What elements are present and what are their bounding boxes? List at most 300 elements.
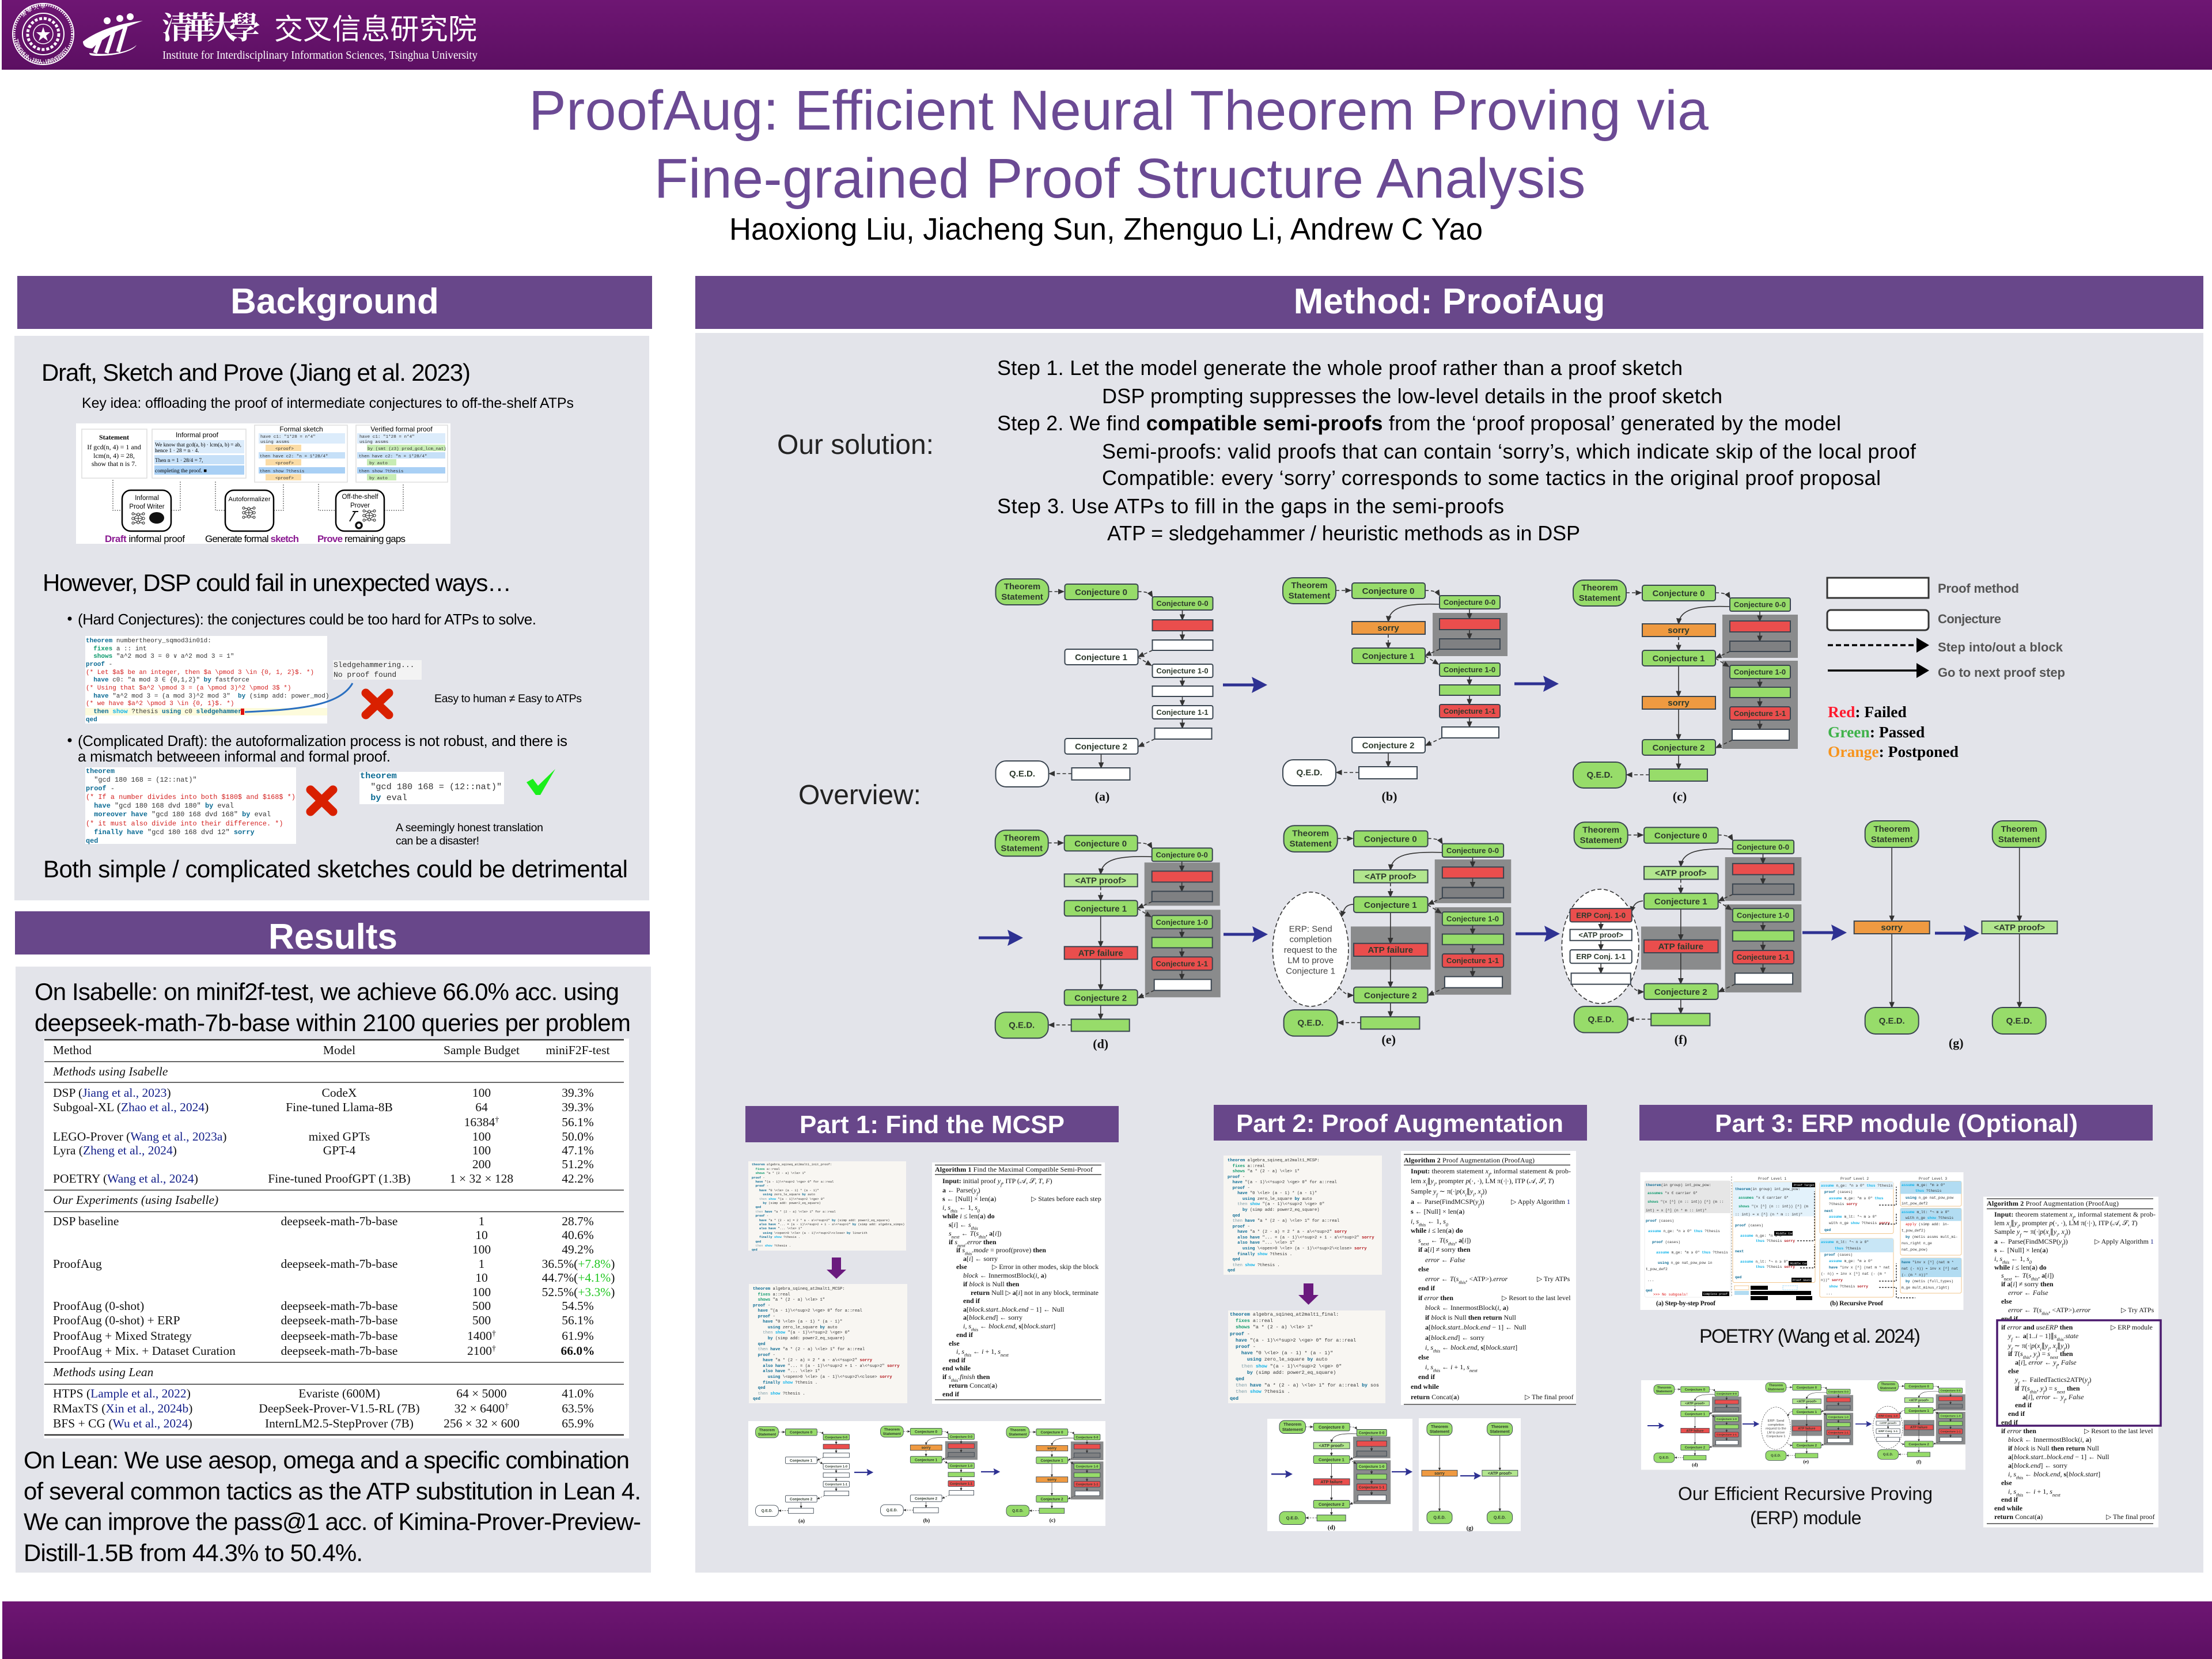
code: initial proof: using zero_le_square by auto: [752, 1193, 815, 1196]
code: MCSP: also have "... \<le> 1": [753, 1369, 820, 1374]
figure: DSP pipeline: hence 1 · 28 = n · 4.: [155, 448, 199, 454]
algorithm 2 with ERP: end if: [2001, 1495, 2018, 1503]
diagram (b): (b): [1382, 789, 1397, 804]
arrow: b to c: [1514, 676, 1559, 692]
results table: 100: [472, 1285, 491, 1299]
figure: POETRY recursive proof: by (metis (full_types): [1906, 1279, 1953, 1283]
figure: POETRY recursive proof: assume m_ge: "m ≥ 0" thus ?thesis: [1656, 1251, 1728, 1255]
algorithm 2: i, sthis ← i + 1, snext: [1425, 1363, 1478, 1373]
algorithm 2: Input: theorem statement xf, informal statement & prob-: [1411, 1167, 1571, 1177]
algorithm 2: ▷ Resort to the last level: [1502, 1294, 1571, 1302]
results table: 100: [472, 1143, 491, 1157]
figure: DSP pipeline: [76, 423, 450, 544]
algorithm 1: ▷ Error in other modes, skip the block: [992, 1263, 1099, 1271]
results table: ProofAug + Mix. + Dataset Curation: [53, 1344, 236, 1358]
figure: POETRY recursive proof: thus ?thesis sorry: [1756, 1265, 1795, 1269]
key idea: Key idea: offloading the proof of intermediate conjectures to off-the-shelf ATPs: [82, 395, 574, 411]
algorithm 2 with ERP: i, sthis ← i + 1, snext: [2008, 1487, 2061, 1498]
heading: Part 1: Part 1: Find the MCSP: [800, 1111, 1065, 1139]
results table: Sample Budget: [444, 1043, 520, 1057]
algorithm 2: return Concat(a): [1411, 1393, 1459, 1401]
diagram (d): Q.E.D.: [1009, 1020, 1035, 1030]
diagram (g): Q.E.D.: [2006, 1016, 2032, 1026]
algorithm 2 with ERP: yf ← FailedTactics2ATP(yf): [2014, 1376, 2091, 1386]
figure: DSP pipeline: Draft informal proof: [105, 533, 185, 544]
arrow: within g: [1935, 925, 1979, 941]
figure: POETRY recursive proof: shows "(x [^] (n :: int)) [^] (m: [1738, 1204, 1808, 1209]
results table: 40.6%: [562, 1228, 594, 1242]
algorithm 2 with ERP: a[i], error ← yf, False: [2022, 1393, 2084, 1403]
heading: Results: Results: [268, 917, 397, 957]
algorithm 1: else: [956, 1263, 967, 1271]
algorithm 2: Algorithm 2 Proof Augmentation (ProofAug): [1404, 1156, 1535, 1164]
diagram (f): ATP failure: [1658, 942, 1703, 952]
callout: no proof found: Sledgehammering...: [334, 661, 414, 669]
steps text: Step 2. We find compatible semi-proofs from the ‘proof proposal’ generated by the model: [997, 411, 1841, 435]
diagram (a): (a): [1095, 789, 1109, 804]
arrow: down to MCSP: [827, 1257, 846, 1279]
results table: Fine-tuned ProofGPT (1.3B): [268, 1172, 411, 1185]
figure: POETRY recursive proof: (a) Step-by-step Proof: [1656, 1300, 1715, 1307]
algorithm 2: ▷ Try ATPs: [1537, 1275, 1570, 1283]
icon: IIIS logo: [83, 13, 143, 56]
diagram (e): Conjecture 1-0: [1446, 914, 1499, 923]
code: initial proof: qed: [752, 1206, 761, 1209]
figure: POETRY recursive proof: >>> No subgoals!: [1653, 1293, 1688, 1297]
algorithm 2 with ERP: error ← T(sthis, <ATP>).error: [2008, 1306, 2090, 1316]
results table: deepseek-math-7b-base: [281, 1344, 397, 1358]
results table: 54.5%: [562, 1299, 594, 1313]
figure: DSP pipeline: Proof Writer: [129, 503, 165, 510]
results table: deepseek-math-7b-base: [281, 1313, 397, 1327]
code: initial proof: proof -: [752, 1176, 765, 1180]
figure: POETRY recursive proof: assume m_ge: "m ≥ 0" thus: [1829, 1196, 1884, 1200]
results table: 41.0%: [562, 1387, 594, 1400]
code: complicated draft example: moreover have "gcd 180 168 dvd 168" by eval: [86, 810, 271, 819]
heading: Part 1: [745, 1106, 1119, 1142]
diagram (d): Statement: [1001, 843, 1043, 853]
results table: mixed GPTs: [309, 1130, 370, 1143]
figure: POETRY recursive proof: qed: [1735, 1275, 1742, 1279]
algorithm 2: ▷ Apply Algorithm 1: [1511, 1198, 1570, 1206]
code: MCSP copy: [1224, 1156, 1382, 1275]
icon: Tsinghua University seal: 清 華 大 學: [21, 4, 46, 17]
note: honest translation: can be a disaster!: [396, 835, 479, 847]
results table: 39.3%: [562, 1086, 594, 1100]
figure: DSP pipeline: have c1: "1*28 = n*4": [359, 435, 415, 440]
figure: POETRY recursive proof: nus_right n_ge: [1902, 1241, 1932, 1245]
algorithm 2 with ERP: snext ← T(sthis, a[i]): [2001, 1271, 2054, 1281]
algorithm 1: [932, 1162, 1105, 1404]
algorithm 2 with ERP: a[block.start..block.end − 1] ← Null: [2008, 1453, 2109, 1461]
code: hard conjecture example: [85, 636, 329, 724]
code: final proof: then show "(a - 1)\<^sup>2 \<ge> 0": [1230, 1363, 1342, 1369]
figure: POETRY recursive proof: t_pow_def2): [1902, 1229, 1926, 1233]
code: simple proof: "gcd 180 168 = (12::nat)": [360, 782, 502, 792]
results table: 52.5%(+3.3%): [542, 1285, 615, 1299]
code: hard conjecture example: have "a^2 mod 3 = (a mod 3)^2 mod 3" by (simp add: power_mod): [86, 693, 329, 700]
code: MCSP: then show ?thesis .: [753, 1392, 805, 1396]
figure: DSP pipeline: then have c2: "n = 1*28/4": [359, 454, 427, 459]
code: initial proof: by (simp add: power2_eq_square): [752, 1202, 821, 1205]
algorithm 1: Algorithm 1 Find the Maximal Compatible Semi-Proof: [935, 1165, 1093, 1173]
figure: POETRY recursive proof: assume n_ge: "n ≥ 0" thus ?thesis: [1821, 1184, 1893, 1188]
code: hard conjecture example: fixes a :: int: [86, 646, 147, 653]
code: hard conjecture example: (* Using that $a^2 \pmod 3 = (a \pmod 3)^2 \pmod 3$ *): [86, 685, 291, 692]
icon: Tsinghua University seal: TSINGHUA · 1911 · UNIVERSITY: [16, 39, 67, 63]
results table: 100: [472, 1243, 491, 1256]
steps text: ATP = sledgehammer / heuristic methods as in DSP: [1107, 521, 1580, 545]
figure: POETRY recursive proof: assume n_lt: "¬ n ≥ 0": [1821, 1240, 1869, 1244]
algorithm 2 with ERP: end if: [2001, 1315, 2018, 1323]
diagram (e): Conjecture 1-1: [1446, 956, 1499, 965]
algorithm 1: return Null ▷ a[i] not in any block, terminate: [971, 1289, 1099, 1297]
algorithm 2: end while: [1411, 1382, 1440, 1391]
subtitle: DSP failures: However, DSP could fail in unexpected ways…: [43, 569, 512, 596]
code: complicated draft example: have "gcd 180 168 dvd 180" by eval: [86, 802, 234, 810]
figure: POETRY recursive proof: proof (cases): [1824, 1253, 1853, 1257]
legend: colours: [1828, 703, 1959, 760]
thumbnail: diagrams a b c: [748, 1421, 1105, 1526]
algorithm 1: snext ← T(sthis, a[i]): [949, 1229, 1001, 1240]
figure: POETRY recursive proof: assume n_lt: "¬ n ≥ 0": [1740, 1260, 1788, 1264]
results table: DSP (Jiang et al., 2023): [53, 1086, 171, 1100]
algorithm 1: else: [949, 1339, 960, 1347]
figure: POETRY recursive proof: assumes "x ∈ carrier G": [1647, 1191, 1698, 1195]
results table: Method: [53, 1043, 92, 1057]
algorithm 1: end if: [949, 1356, 966, 1364]
code: final proof: using zero_le_square by auto: [1230, 1357, 1327, 1362]
diagram (c): Conjecture 1-1: [1734, 709, 1786, 718]
figure: POETRY recursive proof: assume n_ge: "n ≥ 0": [1740, 1234, 1784, 1238]
algorithm 1: a ← Parse(yf): [942, 1186, 980, 1196]
diagram (f): Conjecture 0: [1654, 831, 1707, 841]
bullet: complicated draft: a mismatch betweeen informal and formal proof.: [78, 748, 391, 765]
diagram (b): Statement: [1289, 591, 1330, 601]
algorithm 1: a[i] ← sorry: [963, 1255, 998, 1263]
algorithm 2 with ERP: s ← [Null] × len(a): [1994, 1246, 2048, 1254]
results table: 42.2%: [562, 1172, 594, 1185]
results table: 50.0%: [562, 1130, 594, 1143]
diagram (c): Conjecture 2: [1653, 743, 1705, 753]
results table: 32 × 6400†: [454, 1402, 509, 1415]
figure: POETRY recursive proof: thus ?thesis sorry: [1756, 1239, 1795, 1243]
legend: colours: Green: Passed: [1828, 723, 1925, 741]
arrow: sledgehammer to message: [245, 683, 353, 712]
figure: POETRY recursive proof: t_pow_def2: [1646, 1267, 1668, 1271]
results table: deepseek-math-7b-base: [281, 1329, 397, 1343]
algorithm 2: Sample yf ∼ π(·|p(xi∥yi, xf)): [1411, 1187, 1487, 1197]
algorithm 2: s ← [Null] × len(a): [1411, 1207, 1464, 1215]
code: MCSP: also have "... = (a - 1)\<^sup>2 + 1 - a\<^sup>2" sorry: [753, 1363, 900, 1369]
university name calligraphy: 清華大學: [162, 3, 260, 48]
title: Fine-grained Proof Structure Analysis: [654, 147, 1585, 210]
algorithm 2: block ← InnermostBlock(i, a): [1425, 1304, 1509, 1312]
code: initial proof: qed: [752, 1240, 761, 1244]
legend: node and arrow types: Step into/out a block: [1938, 640, 2063, 654]
code: MCSP: using \<open>0 \<le> (a - 1)\<^sup>2\<close> sorry: [753, 1374, 892, 1380]
diagram (b): Conjecture 0: [1362, 586, 1414, 596]
diagram (a): Conjecture 1-1: [1156, 708, 1209, 717]
algorithm 1: if sthis.finish then: [942, 1373, 990, 1382]
diagram (e): Q.E.D.: [1297, 1018, 1324, 1028]
results table: 200: [472, 1157, 491, 1171]
figure: DSP pipeline: <proof>: [275, 447, 294, 452]
results table: 66.0%: [560, 1344, 595, 1358]
results table: InternLM2.5-StepProver (7B): [265, 1416, 414, 1430]
steps text: [997, 356, 1916, 545]
figure: POETRY recursive proof: using n_ge nat_pow_pow: [1906, 1196, 1953, 1200]
figure: DSP pipeline: We know that gcd(a, b) · lcm(a, b) = ab,: [155, 442, 241, 448]
arrow: d to e: [1224, 926, 1268, 942]
results table: CodeX: [322, 1086, 357, 1100]
legend: node and arrow types: Proof method: [1938, 581, 2019, 596]
results table: Methods using Isabelle: [52, 1065, 168, 1078]
figure: DSP pipeline: Prove remaining gaps: [317, 533, 406, 544]
code: hard conjecture example: shows "a^2 mod 3 = 0 ∨ a^2 mod 3 = 1": [86, 653, 234, 660]
steps text: Step 3. Use ATPs to fill in the gaps in the semi-proofs: [997, 494, 1504, 518]
algorithm 1: i, sthis ← i + 1, snext: [956, 1347, 1009, 1357]
code: simple proof: [359, 771, 504, 804]
diagram (g): [1854, 821, 2057, 1050]
algorithm 1: while i ≤ len(a) do: [942, 1212, 995, 1220]
figure: POETRY recursive proof: n))" sorry: [1821, 1278, 1843, 1282]
algorithm 2 with ERP: Sample yf ∼ π(·|p(xi∥yi, xf)): [1994, 1228, 2070, 1237]
code: initial proof: also have "... \<le> 1": [752, 1227, 802, 1230]
legend: node and arrow types: [1827, 578, 2065, 680]
code: final proof: [1228, 1310, 1385, 1403]
results table: Model: [323, 1043, 355, 1057]
diagram (a): Conjecture 2: [1075, 742, 1127, 752]
algorithm 2: ▷ The final proof: [1525, 1393, 1574, 1401]
algorithm 2 with ERP: yf ← a[1..i − 1]∥sthis.state: [2008, 1332, 2079, 1342]
algorithm 1: end if: [942, 1390, 960, 1398]
figure: POETRY recursive proof: using n_ge nat_pow_pow in: [1658, 1261, 1713, 1265]
authors: Haoxiong Liu, Jiacheng Sun, Zhenguo Li, Andrew C Yao: [729, 212, 1483, 247]
diagram (c): Conjecture 1: [1653, 654, 1705, 664]
figure: POETRY recursive proof: assumes "x ∈ carrier G": [1738, 1196, 1789, 1200]
diagram (b): Conjecture 1-1: [1444, 707, 1495, 715]
figure: POETRY recursive proof: (b) Recursive Proof: [1830, 1300, 1883, 1307]
code: complicated draft example: (* it must also divide into their difference. *): [86, 820, 283, 828]
diagram (c): sorry: [1668, 698, 1690, 708]
diagram (e): LM to prove: [1287, 956, 1334, 965]
heading: Method: [695, 276, 2203, 329]
figure: POETRY recursive proof: Complete proof: [1703, 1293, 1728, 1296]
figure: POETRY recursive proof: have "inv x [^] (nat m *: [1902, 1260, 1954, 1264]
legend: colours: Red: Failed: [1828, 703, 1907, 721]
results table: 1400†: [467, 1329, 496, 1343]
diagram (f): Conjecture 1-1: [1737, 953, 1789, 961]
code: MCSP: have "0 \<le> (a - 1) * (a - 1)": [753, 1320, 842, 1324]
code: MCSP: by (simp add: power2_eq_square): [753, 1336, 845, 1341]
bullet: complicated draft: (Complicated Draft): the autoformalization process is not robust, and there is: [78, 732, 567, 749]
heading: Background: [17, 276, 652, 329]
code: hard conjecture example: (* Let $a$ be an integer, then $a \pmod 3 \in {0, 1, 2}$. *): [86, 669, 314, 676]
diagram (g): Statement: [1998, 835, 2040, 844]
heading: Results: [15, 911, 650, 957]
code: final proof: by (simp add: power2_eq_square): [1230, 1370, 1336, 1376]
algorithm 2 with ERP: if T(sthis, yf) = snext then: [2015, 1384, 2080, 1394]
code: complicated draft example: qed: [86, 837, 98, 845]
figure: POETRY recursive proof: theorem(in group) int_pow_pow:: [1735, 1187, 1800, 1191]
results table: Methods using Lean: [52, 1365, 153, 1379]
diagram (a): Theorem: [1004, 582, 1040, 592]
diagram (g): sorry: [1881, 923, 1903, 933]
results table: [44, 1039, 629, 1438]
figure: POETRY recursive proof: qed: [1824, 1228, 1831, 1232]
figure: POETRY recursive proof: Proof Sketch: [1793, 1279, 1813, 1282]
code: initial proof: also have "... = (a - 1)\<^sup>2 + 1 - a\<^sup>2" by (simp add: algebra_simps): [752, 1223, 904, 1226]
code: hard conjecture example: proof -: [86, 661, 112, 668]
algorithm 2 with ERP: while i ≤ len(a) do: [1994, 1263, 2047, 1271]
algorithm 2: error ← False: [1425, 1256, 1465, 1264]
results table: 100: [472, 1086, 491, 1100]
diagram (c): Conjecture 1-0: [1734, 668, 1786, 676]
results table: HTPS (Lample et al., 2022): [53, 1387, 191, 1400]
results table: 256 × 32 × 600: [444, 1416, 520, 1430]
results table: 56.1%: [562, 1115, 594, 1129]
diagram (e): Conjecture 1: [1286, 966, 1335, 976]
diagram (d): Conjecture 2: [1074, 993, 1127, 1003]
algorithm 2: end if: [1418, 1373, 1435, 1381]
heading: Part 3: Part 3: ERP module (Optional): [1715, 1109, 2078, 1138]
code: MCSP: [749, 1284, 907, 1403]
results table: deepseek-math-7b-base: [281, 1214, 397, 1228]
code: final proof: proof -: [1230, 1331, 1250, 1337]
diagram (e): Statement: [1290, 839, 1332, 849]
algorithm 2 with ERP: error ← False: [2008, 1289, 2048, 1297]
algorithm 1: i, sthis ← 1, s0: [942, 1203, 980, 1213]
diagram (d): Conjecture 0: [1074, 839, 1127, 849]
code: simple proof: theorem: [360, 771, 397, 781]
diagram (e): ERP: Send: [1289, 924, 1332, 934]
code: MCSP: then show "(a - 1)\<^sup>2 \<ge> 0": [753, 1330, 850, 1335]
figure: POETRY recursive proof: by (metis assms mult_mi-: [1906, 1235, 1958, 1239]
figure: DSP pipeline: Verified formal proof: [370, 425, 433, 433]
heading: Part 2: [1214, 1105, 1587, 1141]
caption: ERP module: Our Efficient Recursive Proving: [1678, 1483, 1933, 1504]
figure: POETRY recursive proof: thus ?thesis: [1915, 1189, 1942, 1193]
diagram (d): Conjecture 1-0: [1156, 918, 1208, 926]
bullet: hard conjectures: (Hard Conjectures): the conjectures could be too hard for ATPs to solve.: [78, 611, 536, 628]
results table: 49.2%: [562, 1243, 594, 1256]
icon: red cross: [366, 693, 389, 715]
diagram (b): Conjecture 2: [1362, 741, 1414, 751]
title: [529, 79, 1709, 210]
code: initial proof: then show ?thesis .: [752, 1244, 791, 1248]
heading: Method: Method: ProofAug: [1294, 282, 1605, 321]
figure: POETRY recursive proof: Proof Level 2: [1840, 1177, 1869, 1181]
caption: ERP module: (ERP) module: [1750, 1508, 1862, 1528]
diagram (d): Theorem: [1003, 833, 1040, 843]
top banner: [2, 0, 2212, 70]
algorithm 2 with ERP: end while: [1994, 1504, 2023, 1512]
figure: POETRY recursive proof: proof (cases): [1652, 1240, 1680, 1244]
code: complicated draft example: proof -: [86, 785, 115, 793]
code: final proof: qed: [1230, 1396, 1238, 1402]
code: MCSP: finally show ?thesis .: [753, 1381, 817, 1385]
institute name chinese: 交叉信息研究院: [274, 6, 477, 48]
figure: POETRY recursive proof: proof (cases): [1735, 1224, 1763, 1228]
figure: POETRY recursive proof: nat (- n)) = inv x [^] nat: [1902, 1266, 1958, 1271]
algorithm 2 with ERP: ▷ Apply Algorithm 1: [2094, 1237, 2154, 1245]
algorithm 1: block ← InnermostBlock(i, a): [963, 1271, 1047, 1279]
figure: POETRY recursive proof: ...: [1826, 1291, 1832, 1296]
figure: POETRY recursive proof: Middle Conj: [1790, 1262, 1809, 1266]
code: final proof: then have "a * (2 - a) \<le> 1" for a::real by sos: [1230, 1382, 1379, 1388]
diagram (a): Conjecture 1-0: [1156, 666, 1209, 675]
figure: POETRY recursive proof: qed: [1646, 1289, 1653, 1293]
diagram (b): Q.E.D.: [1296, 768, 1323, 778]
algorithm 2: else: [1418, 1265, 1429, 1273]
note: easy to human: Easy to human ≠ Easy to ATPs: [434, 692, 582, 705]
figure: POETRY recursive proof: shows "(x [^] (n :: int)) [^] (m ::: [1647, 1199, 1724, 1204]
diagram (d): ATP failure: [1078, 948, 1123, 958]
code: final proof: have "0 \<le> (a - 1) * (a - 1)": [1230, 1350, 1333, 1356]
algorithm 2 with ERP: else: [2008, 1367, 2019, 1375]
code: simple proof: by eval: [360, 793, 407, 803]
code: MCSP: then have "a * (2 - a) \<le> 1" for a::real: [753, 1347, 865, 1352]
results table: 500: [472, 1313, 491, 1327]
diagram (f): Q.E.D.: [1588, 1014, 1614, 1024]
figure: DSP pipeline: then have c2: "n = 1*28/4": [260, 454, 328, 459]
results table: 10: [475, 1271, 488, 1285]
algorithm 2: i, sthis ← block.end, s[block.start]: [1425, 1343, 1517, 1354]
diagram (c): (c): [1673, 789, 1687, 804]
diagram (e): ATP failure: [1368, 945, 1413, 955]
code: initial proof: [748, 1161, 906, 1252]
heading: Part 2: Part 2: Proof Augmentation: [1236, 1109, 1563, 1138]
results table: 61.9%: [562, 1329, 594, 1343]
code: initial proof: then have "a * (2 - a) \<le> 1" for a::real: [752, 1210, 836, 1214]
results table: DeepSeek-Prover-V1.5-RL (7B): [259, 1402, 420, 1415]
figure: DSP pipeline: If gcd(n, 4) = 1 and: [87, 443, 141, 451]
figure: POETRY recursive proof: Proof Level 1: [1758, 1177, 1786, 1181]
algorithm 2: snext ← T(sthis, a[i]): [1418, 1236, 1471, 1247]
figure: POETRY recursive proof: have "inv x [^] (nat m * nat: [1829, 1265, 1890, 1270]
diagram (c): Statement: [1579, 593, 1620, 603]
figure: POETRY recursive proof: next: [1824, 1209, 1833, 1213]
results table: 65.9%: [562, 1416, 594, 1430]
diagram (c): Q.E.D.: [1586, 770, 1613, 780]
figure: DSP pipeline: completing the proof. ■: [155, 468, 207, 474]
figure: DSP pipeline: Then n = 1 · 28/4 = 7,: [155, 458, 203, 464]
figure: POETRY recursive proof: Proof Level 3: [1919, 1177, 1947, 1181]
results table: ProofAug (0-shot) + ERP: [53, 1313, 180, 1327]
algorithm 2 with ERP: a ← Parse(FindMCSP(yf)): [1994, 1237, 2068, 1248]
results table: GPT-4: [323, 1143, 356, 1157]
algorithm 2 with ERP: ▷ Try ATPs: [2121, 1306, 2154, 1314]
steps text: Compatible: every ‘sorry’ corresponds to some tactics in the original proof proposal: [1102, 466, 1881, 490]
results table: 64 × 5000: [456, 1387, 507, 1400]
diagram (e): Conjecture 2: [1364, 991, 1417, 1001]
algorithm 2: [1401, 1151, 1576, 1405]
diagram (f): <ATP proof>: [1578, 931, 1623, 940]
code: final proof: theorem algebra_sqineq_at2malt1_final:: [1230, 1312, 1339, 1317]
diagram (b): sorry: [1377, 623, 1399, 633]
code: initial proof: using \<open>0 \<le> (a - 1)\<^sup>2\<close> by linarith: [752, 1232, 868, 1235]
results table: 44.7%(+4.1%): [542, 1271, 615, 1285]
algorithm 2 with ERP: if T(sthis, yf) = snext then: [2008, 1350, 2073, 1359]
steps text: Semi-proofs: valid proofs that can contain ‘sorry’s, which indicate skip of the local proof: [1102, 440, 1916, 463]
note: honest translation: A seemingly honest translation: [396, 821, 543, 834]
results table: Subgoal-XL (Zhao et al., 2024): [53, 1100, 209, 1114]
code: complicated draft example: (* If a number divides into both $180$ and $168$ *): [86, 793, 296, 801]
algorithm 2: a ← Parse(FindMCSP(yf)): [1411, 1198, 1484, 1207]
algorithm 2: if error then: [1418, 1294, 1453, 1302]
diagram (e): completion: [1290, 935, 1332, 945]
